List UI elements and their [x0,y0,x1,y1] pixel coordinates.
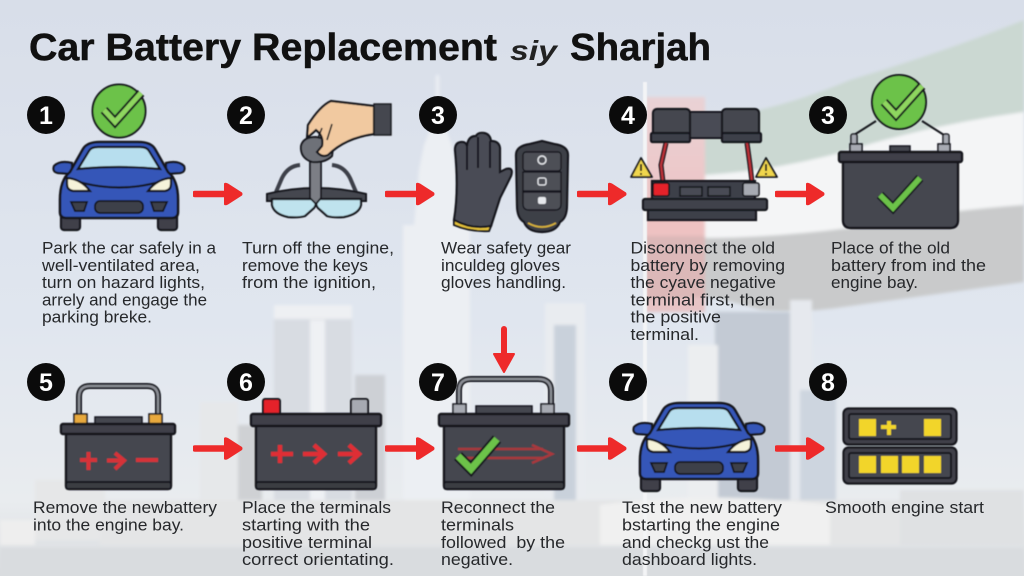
step 1 text: parking breke. [42,308,152,326]
number badge 6: 6 [239,369,253,397]
step 5 text: Place of the old [831,238,950,258]
step 2 [227,96,394,292]
icon: hand, key and glasses [267,101,391,217]
arrow 3 to 4 [579,183,626,205]
number badge 1 [27,96,65,134]
step 8 text: terminals [441,516,514,534]
step 7 text: starting with the [242,516,370,534]
step 1 [27,84,217,326]
step 7 text: correct orientating. [242,550,394,569]
flag of the UAE [645,20,1024,312]
title: Sharjah [570,27,711,69]
number badge 6 [227,363,265,401]
step 7 (numbered 6) [227,363,394,569]
step 8 text: negative. [441,550,513,569]
step 8 text: Reconnect the [441,498,555,517]
flagpole [643,82,647,576]
number badge 3 (second): 3 [821,102,835,130]
step 5 text: engine bay. [831,273,918,292]
step 1 text: turn on hazard lights, [42,273,205,292]
number badge 7 (second) [609,363,647,401]
title: siy [510,35,559,66]
step 4 text: the positive [630,308,721,326]
arrow 4 to 5 [777,183,824,205]
icon: warning right [756,158,777,177]
step 9 text: dashboard lights. [622,550,757,569]
icon: glove [454,133,512,231]
step 3 text [441,238,571,292]
icon: key fob [516,141,568,232]
arrow 6 to 7 [387,437,434,460]
arrow 5 to 6 [195,437,242,460]
step 1 text: Park the car safely in a [42,238,217,258]
step 7 text [242,498,394,569]
number badge 8 [809,363,847,401]
icon: old battery with check [839,75,962,228]
icon: new battery with handle [61,386,175,489]
arrow 8 to 9 [777,437,824,460]
icon: disconnected battery [631,109,777,220]
step 9 text: bstarting the engine [622,516,780,534]
step 4 [609,96,785,344]
step 6 text: Remove the newbattery [33,498,218,517]
number badge 7: 7 [431,369,445,397]
step 2 text: Turn off the engine, [242,238,394,258]
step 9 text [622,498,783,569]
step 5 (numbered 3) [809,75,986,292]
step 2 text [242,238,394,292]
step 8 text: followed by the [441,533,565,552]
step 9 text: and checkg ust the [622,533,769,552]
step 8 text [441,498,565,569]
icon: reconnected battery [439,379,569,489]
number badge 5 [27,363,65,401]
number badge 5: 5 [39,369,53,397]
number badge 3 [419,96,457,134]
title [29,27,711,69]
number badge 8: 8 [821,369,835,397]
number badge 7 [419,363,457,401]
step 6 text [33,498,218,534]
step 3 text: Wear safety gear [441,238,571,258]
icon: battery with terminals [251,399,381,489]
step 4 text: the cyave negative [630,273,776,292]
arrow 2 to 3 [387,183,434,205]
arrow 7 to 8 [579,437,626,460]
step 2 text: from the ignition, [242,273,376,292]
step 4 text: terminal. [630,325,699,344]
number badge 4: 4 [621,102,635,130]
step 10 text: Smooth engine start [825,498,984,517]
number badge 2: 2 [239,102,253,130]
icon: blue car [634,403,764,491]
step 5 text [831,238,986,292]
arrow down [501,329,507,358]
step 2 text: remove the keys [242,256,368,275]
step 9 (numbered 7 again) [609,363,783,569]
step 6 (numbered 5) [27,363,218,534]
number badge 3 (second) [809,96,847,134]
number badge 4 [609,96,647,134]
step 8 (numbered 7) [419,329,569,569]
number badge 1: 1 [39,102,53,130]
step 4 text: terminal first, then [630,290,775,309]
step 3 [419,96,571,292]
icon: battery indicator panel [844,408,956,484]
step 1 text: arrely and engage the [42,290,207,309]
step 7 text: positive terminal [242,533,372,552]
number badge 3: 3 [431,102,445,130]
arrow down head [494,354,514,372]
step 1 text: well-ventilated area, [41,256,200,275]
step 10 (numbered 8) [809,363,984,517]
step 4 text: Disconnect the old [630,238,775,258]
step 3 text: gloves handling. [441,273,566,292]
step 5 text: battery from ind the [831,256,986,275]
step 4 text [630,238,785,344]
step 9 text: Test the new battery [622,498,783,517]
step 4 text: battery by removing [630,256,785,275]
number badge 7 (second): 7 [621,369,635,397]
icon: warning left [631,158,652,177]
step 1 text [41,238,217,326]
icon: car with check [54,84,184,230]
step 3 text: inculdeg gloves [441,256,560,275]
step 6 text: into the engine bay. [33,516,184,534]
step 7 text: Place the terminals [242,498,391,517]
arrow 1 to 2 [195,183,242,205]
title: Car Battery Replacement [29,27,497,69]
number badge 2 [227,96,265,134]
